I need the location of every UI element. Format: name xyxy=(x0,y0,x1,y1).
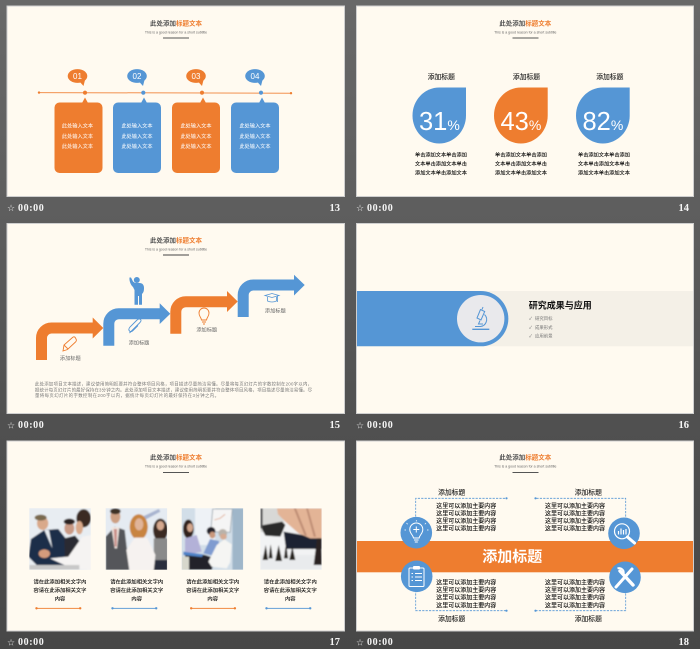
column 1: 31 percent: 单击添加文本单击添加 xyxy=(415,150,467,158)
block: bottom right xyxy=(545,579,605,623)
accent rule 2 xyxy=(111,607,157,610)
column 1: 31 percent: 添加文本单击添加文本 xyxy=(415,168,467,176)
body paragraph xyxy=(35,380,313,399)
card 2: 此处输入文本 xyxy=(121,142,153,150)
icon: graduation cap xyxy=(265,294,279,302)
subtitle: slide 14: This is a good reason for a short subtitle xyxy=(494,30,556,34)
subtitle: slide 17: This is a good reason for a short subtitle xyxy=(145,464,207,468)
column 1: 31 percent xyxy=(412,72,467,176)
list: section items: ✓ xyxy=(529,333,533,338)
card 1: 此处输入文本 xyxy=(62,122,93,130)
icon: magnifier chart xyxy=(608,518,640,549)
block: bottom right: 添加标题 xyxy=(575,614,602,623)
footer: slide 15: 00:00 xyxy=(18,420,44,431)
bubble 04 xyxy=(245,69,265,86)
caption 3: 内容 xyxy=(207,594,219,602)
caption 2 xyxy=(110,578,163,602)
icon: light bulb xyxy=(199,308,209,324)
block: top right: 这里可以添加主要内容 xyxy=(545,510,605,518)
card 2: 此处输入文本 xyxy=(121,122,153,130)
icon: person head xyxy=(134,277,140,283)
caption 3: 容请在此添加相关文字 xyxy=(186,586,239,594)
footer: slide 15: 15 xyxy=(330,420,340,431)
panel: slide 16 section divider xyxy=(356,224,694,414)
block: top left xyxy=(436,488,496,533)
block: bottom left: 这里可以添加主要内容 xyxy=(436,586,496,594)
block: top left: 添加标题 xyxy=(438,488,465,496)
footer: slide 16: 00:00 xyxy=(367,420,393,431)
card 4: 此处输入文本 xyxy=(239,132,271,140)
column 3: 82 percent: 82% xyxy=(582,108,623,136)
column 2: 43 percent: 添加标题 xyxy=(513,72,540,81)
bubble 03: 03 xyxy=(192,72,201,81)
accent rule 1 xyxy=(35,607,81,610)
label: arrow 3: 添加标题 xyxy=(196,325,217,333)
photo: handshake xyxy=(29,508,91,570)
panel: slide 14 percentages xyxy=(356,6,694,196)
block: bottom left: 添加标题 xyxy=(438,614,465,623)
card 4 xyxy=(231,98,279,173)
heading: section title: 研究成果与应用 xyxy=(529,299,592,310)
column 2: 43 percent: 文本单击添加文本单击 xyxy=(495,160,547,168)
accent rule 4 xyxy=(265,607,311,610)
timeline line xyxy=(38,91,292,95)
dashed frame xyxy=(416,498,626,611)
card 3: 此处输入文本 xyxy=(180,132,212,140)
card 4: 此处输入文本 xyxy=(239,122,271,130)
heading: slide 18 title: 此处添加标题文本 xyxy=(499,452,552,462)
card 3 xyxy=(172,98,220,173)
column 1: 31 percent: 文本单击添加文本单击 xyxy=(415,160,467,168)
block: top right xyxy=(545,488,605,533)
column 3: 82 percent xyxy=(576,72,630,176)
block: top left: 这里可以添加主要内容 xyxy=(436,502,496,510)
footer: slide 13: 00:00 xyxy=(18,203,44,214)
orange title band: 添加标题 xyxy=(482,548,542,566)
column 1: 31 percent: 添加标题 xyxy=(428,72,455,81)
heading: slide 13 title: 此处添加标题文本 xyxy=(150,18,202,28)
footer: slide 13: ☆ xyxy=(7,204,15,214)
photo: meeting at desk xyxy=(182,508,244,570)
panel: slide 13 timeline xyxy=(7,6,344,196)
footer: slide 15: ☆ xyxy=(7,422,15,432)
panel: slide 15 stepped arrows xyxy=(7,224,344,414)
caption 2: 请在此添加相关文字内 xyxy=(110,578,163,586)
block: bottom right: 这里可以添加主要内容 xyxy=(545,601,605,609)
block: bottom left xyxy=(436,579,496,623)
footer: slide 13: 13 xyxy=(330,203,340,214)
block: bottom right: 这里可以添加主要内容 xyxy=(545,586,605,594)
heading: slide 15 title: 此处添加标题文本 xyxy=(150,236,202,244)
label: arrow 4: 添加标题 xyxy=(265,307,286,315)
list: section items: ✓ xyxy=(529,316,533,321)
column 3: 82 percent: 添加文本单击添加文本 xyxy=(578,168,630,176)
label: arrow 1: 添加标题 xyxy=(60,354,81,362)
caption 3 xyxy=(186,578,239,602)
icon: idea bulb xyxy=(400,517,432,548)
footer: slide 17: ☆ xyxy=(7,638,15,648)
arrow 4 xyxy=(243,275,305,317)
arrow 2 xyxy=(109,303,170,346)
icon: person xyxy=(129,278,144,305)
footer: slide 14: ☆ xyxy=(356,204,364,214)
footer: slide 16: 16 xyxy=(678,420,689,431)
column 2: 43 percent: 单击添加文本单击添加 xyxy=(495,150,547,158)
footer: slide 18: 18 xyxy=(678,637,689,648)
arrow 1 xyxy=(42,318,103,360)
card 3: 此处输入文本 xyxy=(180,122,212,130)
arrow 3 xyxy=(176,291,238,334)
caption 4 xyxy=(264,578,317,602)
list: section items: 成果形式 xyxy=(535,324,553,331)
block: top right: 这里可以添加主要内容 xyxy=(545,525,605,533)
footer: slide 18 xyxy=(356,637,689,648)
block: top right: 添加标题 xyxy=(575,488,602,496)
icon: clipboard xyxy=(401,560,433,592)
bubble 04: 04 xyxy=(251,72,260,81)
footer: slide 13 xyxy=(7,203,340,214)
frame end dots xyxy=(505,497,537,612)
caption 1: 请在此添加相关文字内 xyxy=(34,578,86,586)
footer: slide 17: 00:00 xyxy=(18,637,44,648)
card 4: 此处输入文本 xyxy=(239,142,271,150)
card 1: 此处输入文本 xyxy=(62,132,93,140)
panel: slide 18 central band xyxy=(356,441,694,631)
photo: three colleagues xyxy=(106,508,168,570)
caption 4: 容请在此添加相关文字 xyxy=(264,586,317,594)
body paragraph: 量将每页幻灯片的字数控制在200字以内，据统计每页幻灯片的最好保持在3分钟之内。 xyxy=(35,392,219,399)
column 2: 43 percent: 添加文本单击添加文本 xyxy=(495,168,547,176)
block: bottom left: 这里可以添加主要内容 xyxy=(436,594,496,602)
card 1 xyxy=(54,98,102,173)
block: top right: 这里可以添加主要内容 xyxy=(545,502,605,510)
heading: slide 14 title: 此处添加标题文本 xyxy=(499,18,552,28)
panel: slide 17 photos xyxy=(7,441,344,631)
footer: slide 17 xyxy=(7,637,340,648)
column 1: 31 percent: 31% xyxy=(419,108,460,136)
block: top left: 这里可以添加主要内容 xyxy=(436,525,496,533)
footer: slide 14 xyxy=(356,203,690,214)
subtitle: slide 15: This is a good reason for a short subtitle xyxy=(145,248,207,252)
column 3: 82 percent: 添加标题 xyxy=(596,72,624,81)
block: bottom right: 这里可以添加主要内容 xyxy=(545,579,605,587)
body paragraph: 此处添加项目文本描述，建议使用简明扼要并符合整体项目风格，项目描述尽量简洁易懂。尽量将每页幻灯片的字数控制在200字以内， xyxy=(35,380,312,388)
icon: tools xyxy=(609,562,641,593)
subtitle: slide 18: This is a good reason for a short subtitle xyxy=(494,464,556,468)
light band xyxy=(357,291,693,346)
icon: paper clip xyxy=(129,319,141,333)
accent rule 3 xyxy=(190,607,236,610)
list: section items: 研究目标 xyxy=(535,315,553,322)
caption 2: 容请在此添加相关文字 xyxy=(110,586,163,594)
list: section items: ✓ xyxy=(529,325,533,330)
blue band xyxy=(357,291,508,346)
footer: slide 17: 17 xyxy=(330,637,340,648)
block: top left: 这里可以添加主要内容 xyxy=(436,510,496,518)
card 3: 此处输入文本 xyxy=(180,142,212,150)
icon: microscope xyxy=(457,295,504,342)
block: top left: 这里可以添加主要内容 xyxy=(436,517,496,525)
caption 4: 内容 xyxy=(285,594,296,602)
bubble 03 xyxy=(186,69,206,86)
column 2: 43 percent xyxy=(494,72,548,176)
list: section items: 应用前景 xyxy=(535,332,553,339)
orange title band xyxy=(357,541,693,572)
bubble 02 xyxy=(127,69,147,86)
footer: slide 18: 00:00 xyxy=(367,637,393,648)
caption 2: 内容 xyxy=(131,594,143,602)
body paragraph: 据统计每页幻灯片的最好保持在3分钟之内。此处添加项目文本描述，建议使用简明扼要并符合整体项目风格，项目描述尽量简洁易懂。尽 xyxy=(35,386,313,393)
icon: pencil xyxy=(63,337,76,351)
label: arrow 2: 添加标题 xyxy=(129,338,149,346)
block: top right: 这里可以添加主要内容 xyxy=(545,517,605,525)
footer: slide 14: 00:00 xyxy=(367,203,393,214)
footer: slide 16: ☆ xyxy=(356,422,364,432)
caption 1: 内容 xyxy=(55,594,66,602)
footer: slide 14: 14 xyxy=(678,203,690,214)
footer: slide 15 xyxy=(7,420,340,432)
column 3: 82 percent: 单击添加文本单击添加 xyxy=(578,150,630,158)
photo: chess hand xyxy=(260,508,322,570)
bubble 02: 02 xyxy=(133,72,142,81)
bubble 01 xyxy=(68,69,87,86)
subtitle: slide 13: This is a good reason for a short subtitle xyxy=(145,30,207,34)
bubble 01: 01 xyxy=(73,72,82,81)
caption 1: 容请在此添加相关文字 xyxy=(34,586,86,594)
block: bottom right: 这里可以添加主要内容 xyxy=(545,594,605,602)
column 2: 43 percent: 43% xyxy=(500,108,541,136)
block: bottom left: 这里可以添加主要内容 xyxy=(436,579,496,587)
list: section items xyxy=(529,315,553,339)
caption 3: 请在此添加相关文字内 xyxy=(186,578,239,586)
card 1: 此处输入文本 xyxy=(62,142,93,150)
block: bottom left: 这里可以添加主要内容 xyxy=(436,601,496,609)
card 2 xyxy=(113,98,161,173)
footer: slide 18: ☆ xyxy=(356,638,364,648)
column 3: 82 percent: 文本单击添加文本单击 xyxy=(578,160,630,168)
card 2: 此处输入文本 xyxy=(121,132,153,140)
footer: slide 16 xyxy=(356,420,689,432)
heading: slide 17 title: 此处添加标题文本 xyxy=(150,452,202,462)
caption 4: 请在此添加相关文字内 xyxy=(264,578,317,586)
caption 1 xyxy=(34,578,86,602)
